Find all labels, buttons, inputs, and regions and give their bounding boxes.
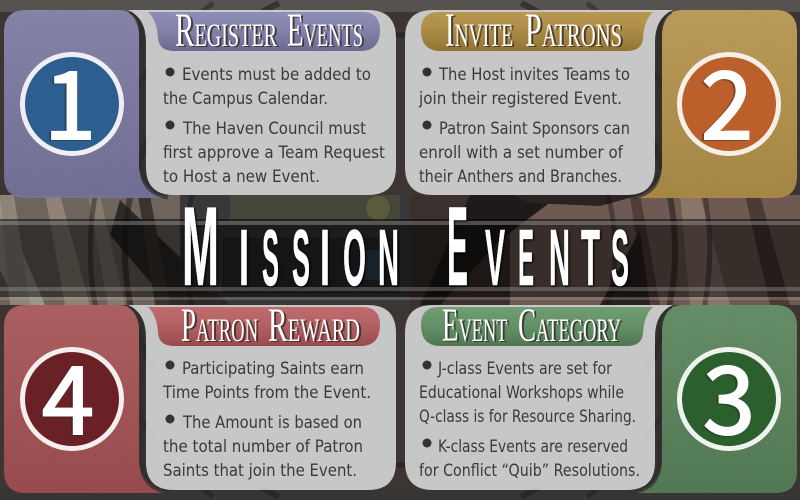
panel: step 2 invite patrons <box>405 4 797 198</box>
step 4 heading: PATRON <box>181 299 306 352</box>
step 1 heading: EVENTS <box>287 4 410 57</box>
title: Mission Events: V <box>485 213 505 302</box>
step 4 content card <box>128 305 396 492</box>
step 3 heading <box>421 299 653 352</box>
step 4 text: Saints that join the Event. <box>163 461 357 481</box>
step 1 colored tile <box>4 10 168 198</box>
step 4 text <box>162 359 371 481</box>
step 3 content card <box>405 305 673 492</box>
step 2 heading <box>421 4 653 57</box>
title: Mission Events: E <box>447 184 468 309</box>
step 4 text: the total number of Patron <box>163 437 363 457</box>
step 1 text: first approve a Team Request <box>163 143 385 163</box>
step 1 number badge <box>22 31 122 167</box>
step 1 text: The Haven Council must <box>182 119 366 139</box>
step 4 text: Time Points from the Event. <box>162 383 371 403</box>
step 1 content card <box>128 10 396 197</box>
step 4 text: The Amount is based on <box>182 413 362 433</box>
title: Mission Events: I <box>320 213 330 302</box>
step 1 number badge: 1 <box>44 31 96 167</box>
title: Mission Events: T <box>581 213 600 302</box>
title: Mission Events: S <box>262 213 279 302</box>
step 3 text: Q-class is for Resource Sharing. <box>419 407 636 427</box>
step 2 colored tile <box>633 10 797 198</box>
title: Mission Events: E <box>518 213 534 302</box>
step 1 text: to Host a new Event. <box>163 167 320 187</box>
step 2 content card <box>405 10 673 197</box>
step 2 heading: PATRONS <box>525 4 670 57</box>
title: Mission Events: S <box>292 213 310 302</box>
step 3 number badge <box>680 326 778 462</box>
title: Mission Events: M <box>182 184 219 309</box>
step 2 text: join their registered Event. <box>418 89 622 109</box>
title band stripes <box>0 219 800 300</box>
step 1 heading <box>148 4 380 57</box>
step 3 colored tile <box>633 305 797 493</box>
step 4 text: Participating Saints earn <box>182 359 364 379</box>
text: S <box>611 213 629 302</box>
step 4 number badge: 4 <box>42 326 94 462</box>
panel: step 1 register events <box>4 4 396 198</box>
step 2 text <box>418 65 630 187</box>
step 3 number badge: 3 <box>703 326 755 462</box>
step 2 text: enroll with a set number of <box>419 143 624 163</box>
step 1 text: the Campus Calendar. <box>163 89 328 109</box>
title: Mission Events: O <box>343 213 366 302</box>
step 4 number badge <box>22 326 122 462</box>
step 1 text: Events must be added to <box>182 65 371 85</box>
step 4 heading <box>148 299 380 352</box>
step 2 text: their Anthers and Branches. <box>419 167 622 187</box>
step 2 number badge <box>680 31 778 167</box>
step 1 text <box>163 65 385 187</box>
step 2 text: Patron Saint Sponsors can <box>439 119 630 139</box>
step 2 text: The Host invites Teams to <box>438 65 630 85</box>
step 3 text: K-class Events are reserved <box>438 437 628 457</box>
title: Mission Events: N <box>378 213 399 302</box>
step 2 heading: INVITE <box>445 4 553 57</box>
step 3 text: J-class Events are set for <box>437 359 612 379</box>
step 3 text: for Conflict “Quib” Resolutions. <box>419 461 640 481</box>
step 4 heading: REWARD <box>268 299 405 352</box>
panel: step 3 event category <box>405 299 797 493</box>
step 3 heading: EVENT <box>442 299 546 352</box>
title: Mission Events: N <box>549 213 570 302</box>
panel: step 4 patron reward <box>4 299 396 493</box>
step 2 number badge: 2 <box>701 31 753 167</box>
step 1 heading: REGISTER <box>175 4 330 57</box>
title: Mission Events: I <box>239 213 249 302</box>
step 3 text: Educational Workshops while <box>419 383 624 403</box>
step 3 text <box>419 359 640 481</box>
step 3 heading: CATEGORY <box>518 299 688 352</box>
step 4 colored tile <box>4 305 168 493</box>
